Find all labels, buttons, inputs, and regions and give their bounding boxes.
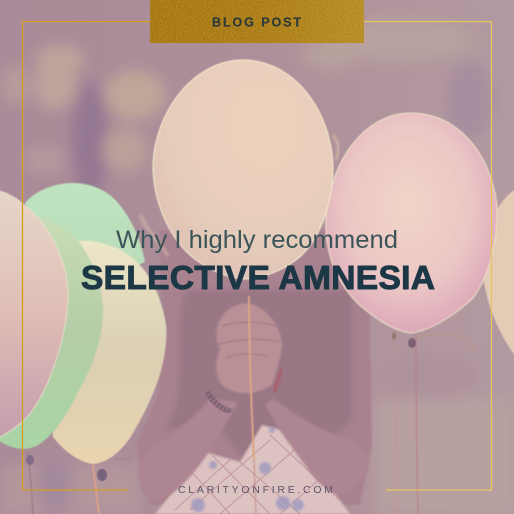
balloon: mint back left xyxy=(25,183,145,300)
girl: hair xyxy=(136,135,372,505)
balloon: pink left xyxy=(0,190,68,440)
balloon: cream left xyxy=(40,241,166,464)
balloon: pink right xyxy=(326,113,497,333)
balloon: yellow behind pink xyxy=(367,290,394,326)
blog post banner xyxy=(150,0,364,43)
girl: dress xyxy=(155,425,350,514)
girl: arms xyxy=(138,398,369,501)
balloon: green front left xyxy=(0,217,103,449)
main title: SELECTIVE AMNESIA xyxy=(81,260,435,297)
girl: hands and bracelets xyxy=(207,303,282,412)
balloon: right edge xyxy=(482,187,514,362)
banner label: BLOG POST xyxy=(212,16,301,30)
subtitle: Why I highly recommend xyxy=(116,226,398,254)
website: CLARITYONFIRE.COM xyxy=(178,484,333,496)
balloon: center xyxy=(153,60,333,279)
balloon strings xyxy=(26,296,474,514)
